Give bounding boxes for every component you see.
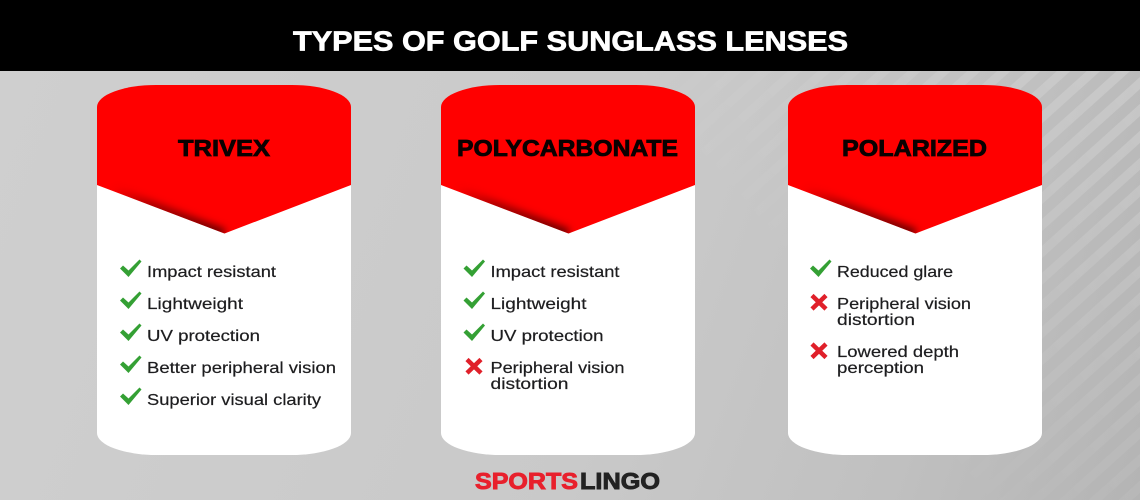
panel: Polycarbonate xyxy=(441,85,695,455)
feature: better peripheral vision: Better peripheral vision xyxy=(147,360,336,377)
feature: UV protection xyxy=(464,324,604,345)
drawback: peripheral vision distortion: distortion xyxy=(490,376,568,393)
drawback: lowered depth perception: Lowered depth xyxy=(837,344,959,361)
panel: Polarized xyxy=(788,85,1042,455)
red header xyxy=(788,85,1042,234)
heading: TRIVEX xyxy=(178,135,270,161)
card body xyxy=(97,120,351,455)
card body xyxy=(441,120,695,455)
feature: UV protection xyxy=(120,324,260,345)
feature: impact resistant: Impact resistant xyxy=(490,264,620,281)
title banner: TYPES OF GOLF SUNGLASS LENSES xyxy=(293,26,848,56)
feature: impact resistant xyxy=(464,260,620,281)
title banner xyxy=(0,0,1140,71)
feature: lightweight: Lightweight xyxy=(490,296,587,313)
feature: lightweight xyxy=(464,292,587,313)
feature: superior visual clarity xyxy=(120,388,321,409)
heading: POLYCARBONATE xyxy=(457,135,678,161)
feature: UV protection: UV protection xyxy=(490,328,604,345)
drawback: peripheral vision distortion xyxy=(467,360,624,393)
drawback: peripheral vision distortion xyxy=(812,296,971,329)
background xyxy=(886,71,1140,500)
feature: superior visual clarity: Superior visual clarity xyxy=(147,392,321,409)
drawback: peripheral vision distortion: Peripheral vision xyxy=(490,360,624,377)
drawback: lowered depth perception xyxy=(812,344,959,377)
feature: lightweight xyxy=(120,292,244,313)
logo: SportsLingo xyxy=(475,468,660,494)
feature: impact resistant xyxy=(120,260,277,281)
feature: lightweight: Lightweight xyxy=(147,296,244,313)
feature: better peripheral vision xyxy=(120,356,336,377)
drawback: peripheral vision distortion: Peripheral vision xyxy=(837,296,971,313)
feature: impact resistant: Impact resistant xyxy=(147,264,277,281)
heading: POLARIZED xyxy=(842,135,987,161)
drawback: lowered depth perception: perception xyxy=(837,360,924,377)
feature: reduced glare: Reduced glare xyxy=(837,264,953,281)
panel: Trivex xyxy=(97,85,351,455)
red header xyxy=(441,85,695,234)
card body xyxy=(788,120,1042,455)
logo: SportsLingo: LINGO xyxy=(580,468,660,494)
red header xyxy=(97,85,351,234)
feature: UV protection: UV protection xyxy=(147,328,260,345)
logo: SportsLingo: SPORTS xyxy=(475,468,578,494)
drawback: peripheral vision distortion: distortion xyxy=(837,312,915,329)
feature: reduced glare xyxy=(810,260,953,281)
